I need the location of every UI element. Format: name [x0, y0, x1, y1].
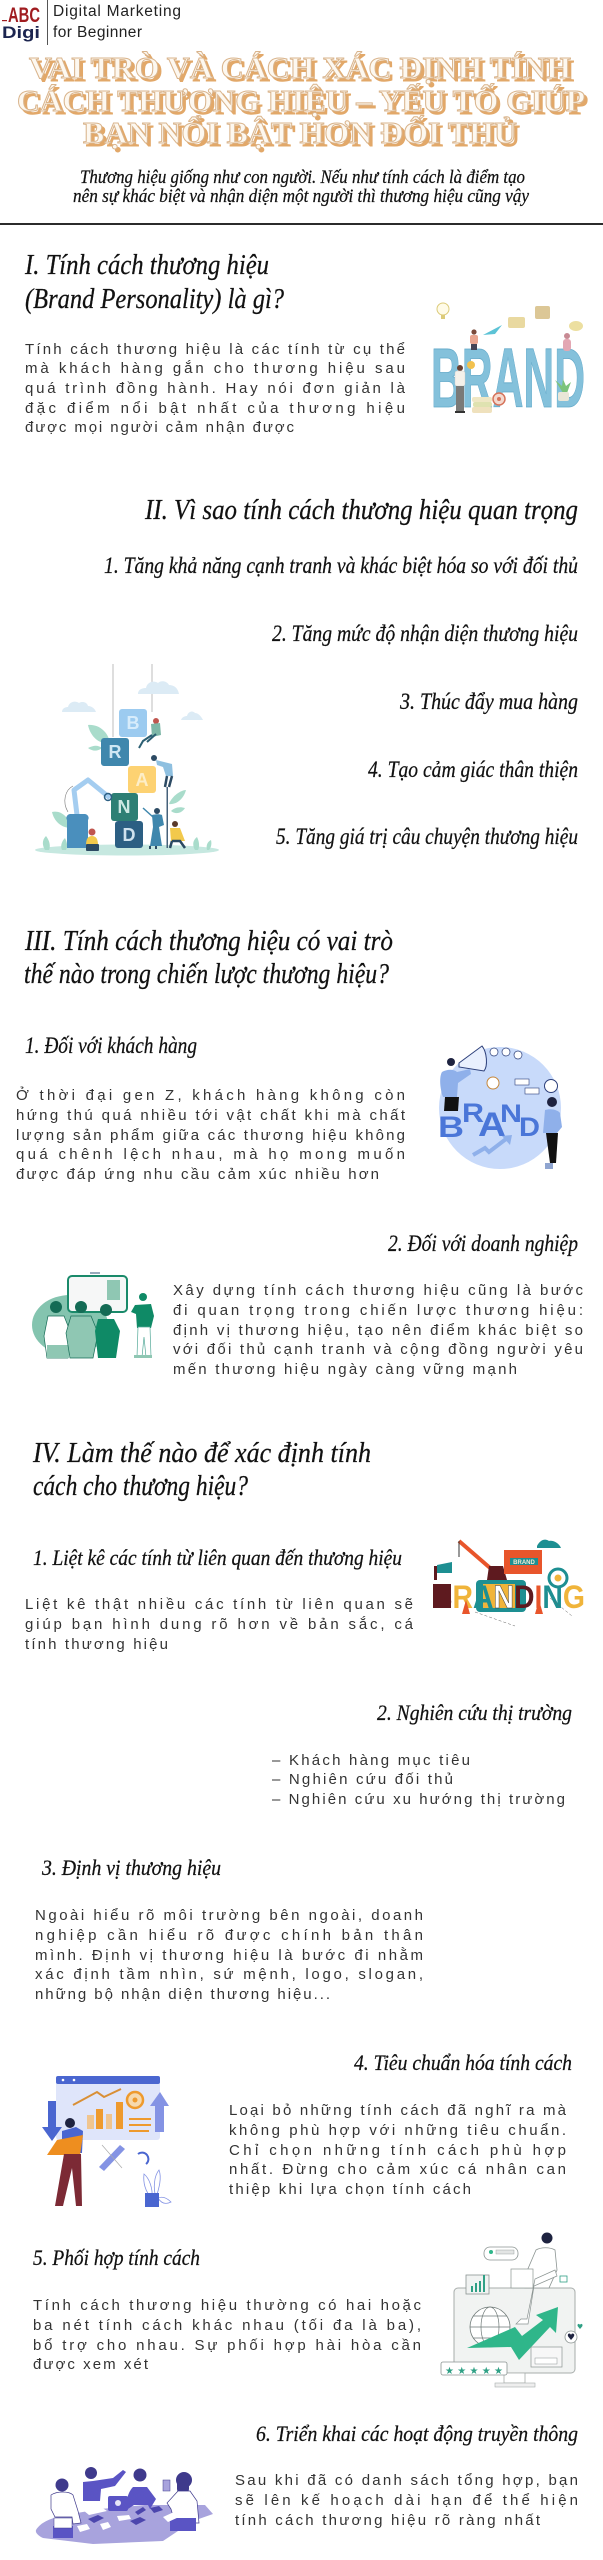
list: market research [272, 1752, 565, 1808]
logo: ABC Digi: Digi [2, 23, 40, 42]
text block: III.2: Xây dựng tính cách thương hiệu cũng là bước [173, 1282, 584, 1299]
text block: IV.3: nghiệp cần hiểu rõ được chính bản thân [35, 1927, 423, 1944]
title: CÁCH THƯƠNG HIỆU – YẾU TỐ GIÚP [17, 82, 585, 118]
text block: IV.4: Loại bỏ những tính cách đã nghĩ ra mà [229, 2102, 567, 2119]
title [17, 50, 585, 150]
heading: section III: III. Tính cách thương hiệu có vai trò [24, 926, 393, 957]
text block: III.1: hứng thú quá nhiều tới vật chất khi mà chất [16, 1107, 406, 1124]
illustration: monitor with growth arrow: ♥ [567, 2333, 575, 2343]
text block: section I: mà khách hàng gắn cho thương hiệu sau [25, 360, 405, 377]
illustration: BRAND with megaphone: A [478, 1106, 506, 1144]
text block: section I: quá trình đồng hành. Hay nói đơn giản là [25, 380, 406, 397]
illustration: branding collage [432, 1540, 585, 1626]
text block: IV.5: bổ trợ cho nhau. Sự phối hợp hài hòa cần [33, 2337, 421, 2354]
illustration: BRAND with megaphone: B [438, 1111, 464, 1144]
subheading: IV.4: 4. Tiêu chuẩn hóa tính cách [354, 2050, 572, 2075]
illustration: brand blocks: R [108, 742, 122, 762]
list: market research: – Khách hàng mục tiêu [272, 1752, 470, 1769]
illustration: branding collage: BRAND [513, 1560, 535, 1566]
illustration: team meeting [36, 2467, 213, 2544]
text block: III.1: lượng sản phẩm giữa các thương hiệu không [16, 1127, 405, 1144]
subtitle: Thương hiệu giống như con người. Nếu như tính cách là điểm tạo [80, 167, 525, 188]
subheading: IV.5: 5. Phối hợp tính cách [33, 2245, 200, 2270]
text block: III.2: với đối thủ cạnh tranh và cộng đồng người yêu [173, 1341, 583, 1358]
text block: III.1: quá chênh lệch nhau, mà họ mong muốn [16, 1146, 405, 1163]
illustration: brand blocks: B [126, 713, 140, 733]
text block: section I: đặc điểm nổi bật nhất của thương hiệu [25, 400, 405, 417]
text block: IV.5: ba nét tính cách khác nhau (tối đa là ba), [33, 2317, 421, 2334]
text block: IV.6: sẽ lên kế hoạch dài hạn để thể hiện [235, 2492, 578, 2509]
illustration: brand blocks [35, 664, 219, 856]
heading: section I [24, 250, 284, 315]
heading: section I: (Brand Personality) là gì? [25, 284, 284, 315]
heading: section I: I. Tính cách thương hiệu [24, 250, 269, 281]
illustration: brand blocks: A [136, 770, 148, 790]
heading: section III: thế nào trong chiến lược thương hiệu? [24, 959, 389, 990]
text block: IV.3: những bộ nhận diện thương hiệu... [35, 1986, 330, 2003]
text block: IV.6 [235, 2472, 578, 2529]
text block: IV.1: tính thương hiệu [25, 1636, 168, 1653]
text block: IV.3 [35, 1907, 423, 2003]
illustration: monitor with growth arrow: ★★★★★ [445, 2366, 503, 2377]
heading: section IV [32, 1438, 371, 1502]
logo: ABC Digi: for Beginner [53, 24, 142, 41]
list: market research: – Nghiên cứu xu hướng thị trường [272, 1791, 565, 1808]
subheading: III.1: 1. Đối với khách hàng [25, 1033, 197, 1058]
logo: ABC Digi: ABC [8, 4, 40, 27]
illustration: brand blocks: D [122, 825, 136, 845]
subtitle [73, 167, 530, 207]
text block: III.2 [173, 1282, 584, 1378]
heading: section IV: IV. Làm thế nào để xác định tính [32, 1438, 371, 1469]
illustration: marketing dashboard [42, 2076, 171, 2207]
text block: III.2: mến thương hiệu ngày càng vững mạnh [173, 1361, 517, 1378]
illustration: BRAND with megaphone: D [519, 1112, 540, 1142]
text block: IV.4: nhất. Đừng cho cảm xúc cá nhân can [229, 2161, 566, 2178]
text block: IV.3: Ngoài hiểu rõ môi trường bên ngoài, doanh [35, 1907, 423, 1924]
subheading: IV.1: 1. Liệt kê các tính từ liên quan đến thương hiệu [33, 1545, 402, 1570]
text block: IV.6: Sau khi đã có danh sách tổng hợp, bạn [235, 2472, 578, 2489]
text block: section I [25, 341, 406, 436]
text block: III.1 [16, 1086, 406, 1183]
illustration: branding collage: BRANDING [432, 1579, 585, 1615]
text block: section I: Tính cách thương hiệu là các tính từ cụ thể [25, 341, 405, 358]
text block: III.1: được đáp ứng nhu cầu cảm xúc nhiều hơn [16, 1166, 379, 1183]
illustration: brand blocks: N [118, 797, 130, 817]
list: market research: – Nghiên cứu đối thủ [272, 1771, 453, 1788]
logo: ABC Digi: Digital Marketing [53, 3, 181, 20]
text block: IV.3: xác định tầm nhìn, sứ mệnh, logo, slogan, [35, 1966, 423, 1983]
text block: IV.1 [25, 1596, 414, 1653]
heading: section IV: cách cho thương hiệu? [33, 1471, 248, 1502]
text block: IV.6: tính cách thương hiệu rõ ràng nhất [235, 2512, 541, 2529]
text block: IV.1: Liệt kê thật nhiều các tính từ liên quan sẽ [25, 1596, 413, 1613]
list: reasons [104, 553, 578, 849]
subheading: IV.3: 3. Định vị thương hiệu [41, 1855, 221, 1880]
logo: ABC Digi [2, 0, 181, 45]
illustration: monitor with growth arrow: ♥ [577, 2323, 583, 2331]
text block: IV.5 [33, 2297, 422, 2373]
list: reasons: 3. Thúc đẩy mua hàng [399, 689, 578, 714]
text block: IV.5: được xem xét [33, 2356, 149, 2373]
illustration: team in front of board [32, 1272, 154, 1358]
subheading: IV.2: 2. Nghiên cứu thị trường [377, 1700, 572, 1725]
text block: IV.1: giúp bạn hình dung rõ hơn về bản sắc, cá [25, 1616, 414, 1633]
illustration: monitor with growth arrow [441, 2232, 583, 2387]
heading: section III [24, 926, 393, 990]
text block: III.2: đi quan trọng trong chiến lược thương hiệu: [173, 1302, 583, 1319]
text block: IV.5: Tính cách thương hiệu thường có hai hoặc [33, 2297, 422, 2314]
title: VAI TRÒ VÀ CÁCH XÁC ĐỊNH TÍNH [29, 50, 571, 85]
text block: III.2: định vị thương hiệu, tạo nên điểm khác biệt so [173, 1322, 583, 1339]
text block: IV.3: mình. Định vị thương hiệu là bước đi nhằm [35, 1947, 423, 1964]
text block: IV.4: không phù hợp với những tiêu chuẩn. [229, 2122, 566, 2139]
title: BẠN NỔI BẬT HƠN ĐỐI THỦ [83, 114, 517, 150]
illustration: BRAND with megaphone: N [500, 1100, 522, 1128]
text block: IV.4 [229, 2102, 567, 2198]
text block: IV.4: Chỉ chọn những tính cách phù hợp [229, 2142, 566, 2159]
text block: III.1: Ở thời đại gen Z, khách hàng không còn [16, 1086, 405, 1104]
subtitle: nên sự khác biệt và nhận diện một người thì thương hiệu cũng vậy [73, 186, 530, 207]
illustration: BRAND with megaphone [438, 1046, 562, 1169]
text block: IV.4: thiệp khi lựa chọn tính cách [229, 2181, 471, 2198]
text block: section I: được mọi người cảm nhận được [25, 419, 294, 436]
illustration: BRAND with megaphone: R [462, 1098, 484, 1128]
